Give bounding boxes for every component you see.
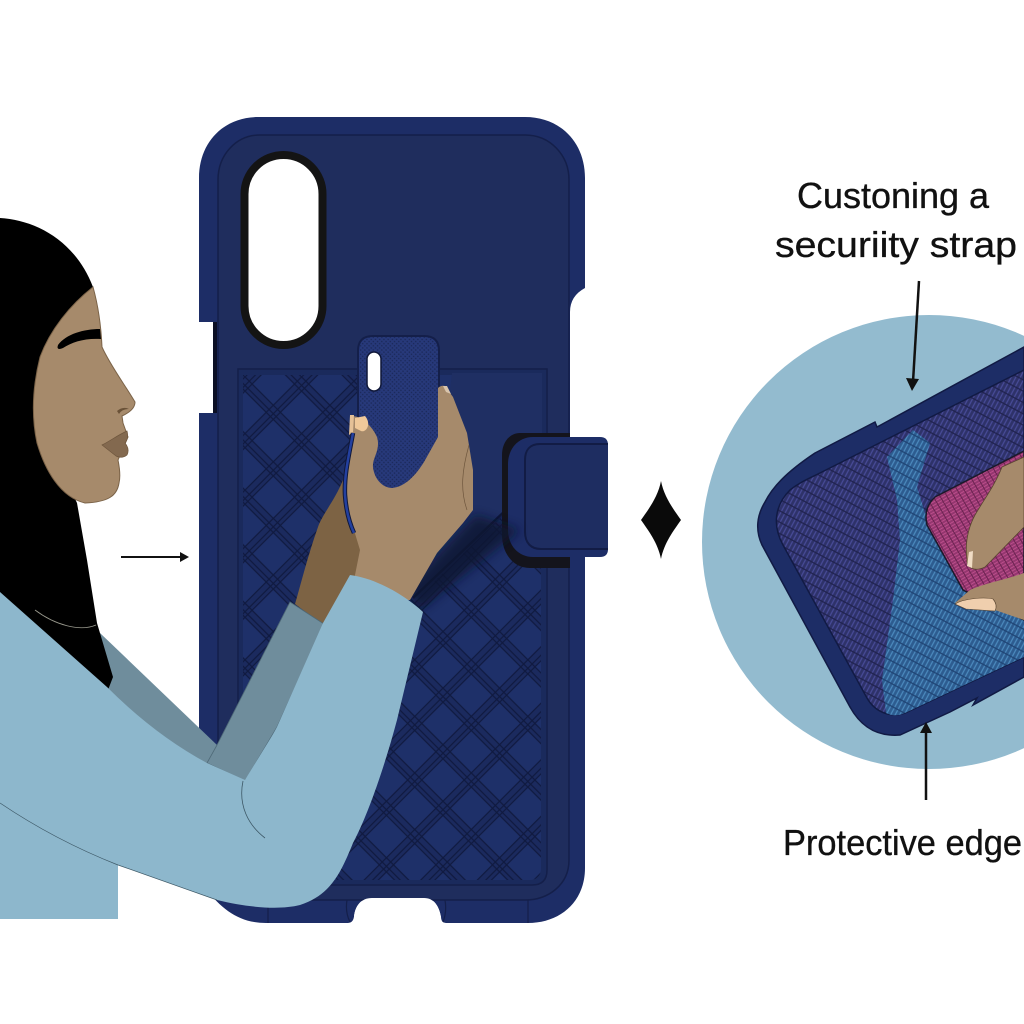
circle background — [702, 315, 1024, 769]
left arrow head — [180, 552, 189, 562]
lower edge seams — [268, 900, 528, 923]
tilted case outer — [758, 347, 1024, 735]
bottom arrow head — [920, 722, 932, 733]
label: security strap — [775, 175, 1017, 265]
button body — [508, 437, 608, 557]
lattice panel — [238, 369, 547, 885]
mini phone body — [358, 336, 439, 495]
top arrow head — [906, 378, 919, 391]
left arrow line — [121, 556, 183, 558]
case body — [199, 117, 585, 923]
torso line — [0, 803, 217, 900]
diamond separator — [641, 481, 681, 559]
tilted case fabric blue — [882, 430, 1024, 715]
diagonal edge — [413, 509, 507, 598]
lips — [102, 431, 128, 457]
finger nail — [355, 416, 368, 431]
side button — [502, 433, 608, 568]
side notch shadow — [213, 322, 217, 413]
nostril — [117, 408, 129, 414]
top fingertip nail — [443, 386, 451, 394]
mini phone — [358, 336, 439, 495]
hand holding mini phone — [295, 336, 473, 630]
phone case — [199, 117, 608, 925]
back forearm sleeve — [207, 602, 324, 781]
lattice outline — [238, 369, 547, 885]
bottom pointer arrow — [920, 722, 932, 800]
front hand — [345, 386, 473, 600]
body and front arm — [0, 575, 423, 919]
button shadow — [502, 433, 570, 568]
label line two: securiity strap — [775, 224, 1017, 265]
security strap — [345, 433, 354, 533]
case inner panel — [218, 135, 569, 900]
person — [0, 218, 423, 919]
infographic canvas — [0, 117, 1024, 923]
detail circle — [702, 315, 1024, 769]
rear thumb nail — [349, 415, 354, 435]
elbow fold line — [242, 781, 265, 838]
camera cutout — [244, 155, 322, 345]
hand crease — [463, 445, 469, 510]
top pointer arrow — [906, 281, 919, 391]
hijab fold — [35, 610, 96, 628]
label line one: Custoning a — [797, 175, 990, 216]
bottom arrow line — [925, 730, 927, 800]
lattice texture — [243, 375, 541, 880]
upper fingernail — [967, 551, 973, 568]
upper finger — [966, 457, 1024, 569]
rear hand — [295, 415, 372, 630]
back sleeve near neck — [100, 633, 217, 775]
tilted case fabric dark — [776, 370, 1024, 715]
hijab — [0, 218, 113, 690]
bottom port notch — [348, 898, 446, 925]
face — [33, 287, 135, 503]
tilted case — [758, 347, 1024, 735]
plain upper right area — [415, 373, 542, 600]
lower finger — [955, 573, 1024, 620]
button inner outline — [525, 444, 608, 549]
lower fingernail — [955, 598, 996, 611]
strap colour — [345, 433, 354, 533]
strap outline — [345, 433, 354, 533]
left arrow — [121, 552, 189, 562]
eyebrow — [58, 329, 101, 349]
shadow under hand — [405, 515, 520, 610]
mini phone camera — [367, 352, 381, 391]
top arrow line — [913, 281, 919, 382]
pink inner panel — [926, 451, 1024, 620]
